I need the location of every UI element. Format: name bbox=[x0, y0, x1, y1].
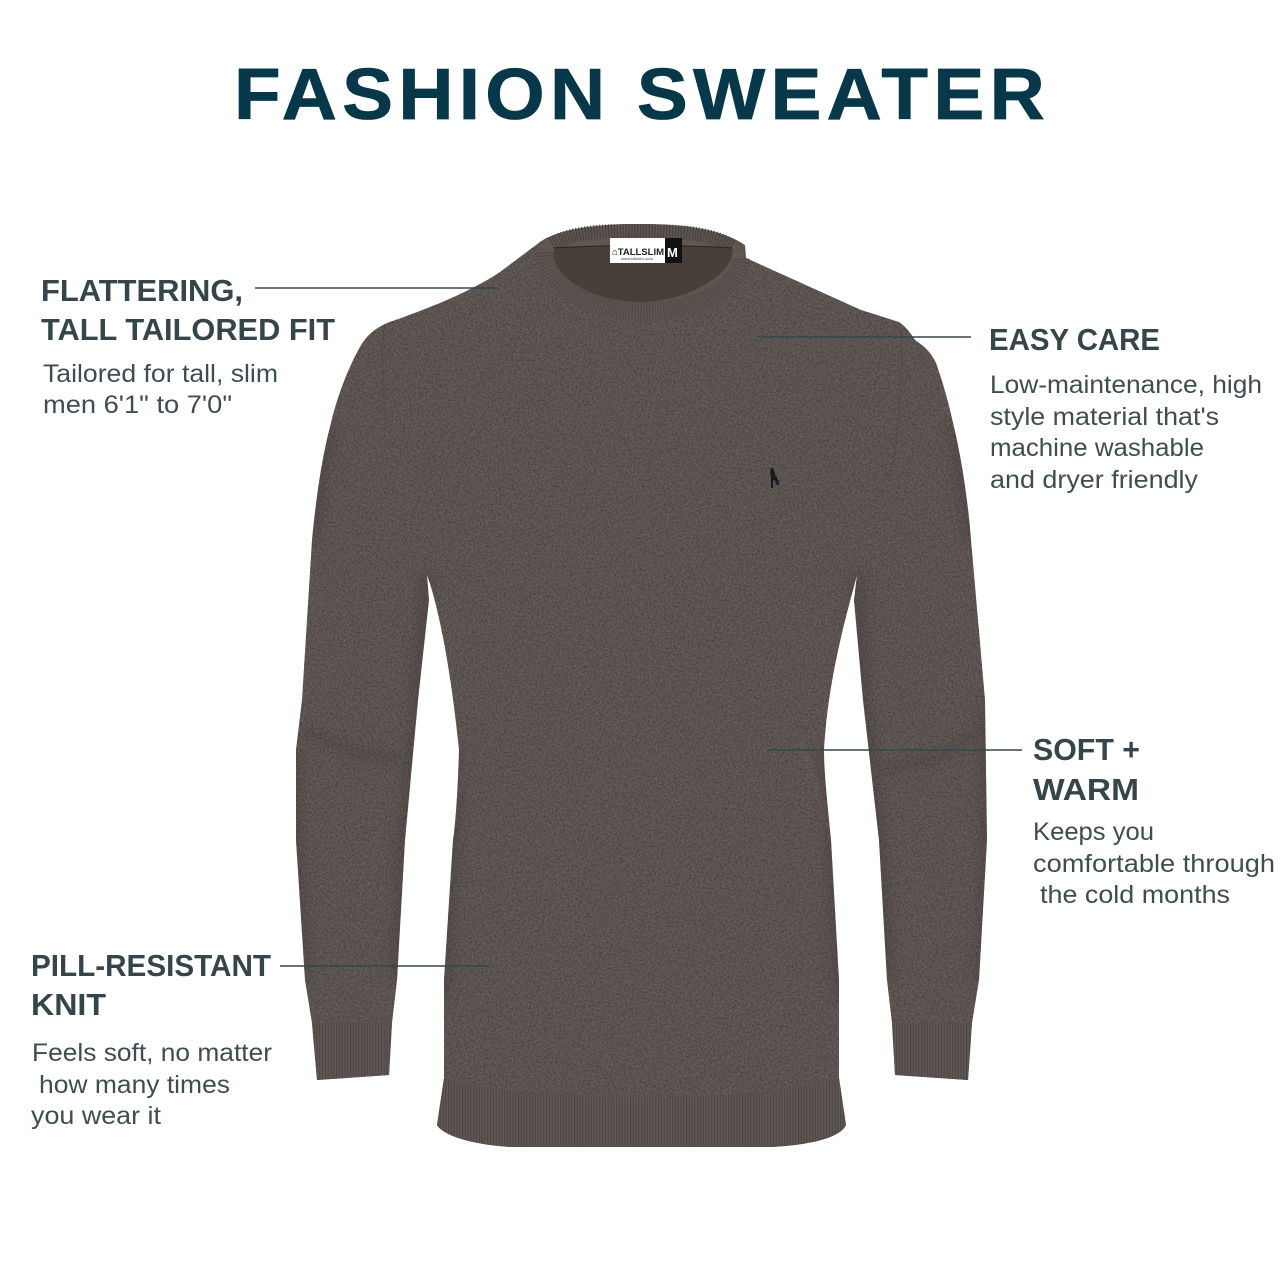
callout: soft and warm: SOFT + bbox=[1033, 732, 1140, 767]
neck label: TALLSLIM size M: ⌂TALLSLIM bbox=[612, 247, 664, 258]
icon: embroidered logo bbox=[770, 468, 779, 488]
neck label: TALLSLIM size M bbox=[610, 238, 682, 263]
callout: easy care: and dryer friendly bbox=[990, 466, 1199, 494]
callout: soft and warm: the cold months bbox=[1040, 881, 1230, 909]
sweater product photo bbox=[280, 210, 1000, 1160]
callout: flattering fit bbox=[41, 273, 497, 419]
sweater fabric bbox=[280, 210, 1000, 1160]
crew neck collar bbox=[538, 224, 748, 322]
callout: flattering fit: FLATTERING, bbox=[41, 273, 243, 308]
callout: pill-resistant knit: how many times bbox=[39, 1071, 230, 1099]
title: FASHION SWEATER bbox=[234, 55, 1050, 135]
left cuff ribbing bbox=[312, 1023, 392, 1080]
callout: easy care: machine washable bbox=[990, 434, 1204, 462]
bottom hem ribbing bbox=[437, 1078, 846, 1147]
callout: soft and warm: Keeps you bbox=[1033, 818, 1154, 846]
callout: pill-resistant knit bbox=[31, 948, 490, 1130]
callout: flattering fit: men 6'1" to 7'0" bbox=[43, 391, 232, 419]
callout: easy care bbox=[757, 322, 1262, 494]
callout: soft and warm: comfortable through bbox=[1033, 850, 1275, 878]
callout: soft and warm bbox=[768, 732, 1275, 909]
callout: pill-resistant knit: PILL-RESISTANT bbox=[31, 948, 271, 983]
callout: flattering fit: TALL TAILORED FIT bbox=[41, 312, 335, 347]
callout: easy care: Low-maintenance, high bbox=[990, 371, 1262, 399]
callout: easy care: EASY CARE bbox=[989, 322, 1160, 357]
right cuff ribbing bbox=[892, 1023, 972, 1080]
callout: easy care: style material that's bbox=[990, 403, 1219, 431]
callout: flattering fit: Tailored for tall, slim bbox=[43, 360, 278, 388]
neck label: TALLSLIM size M: M bbox=[667, 245, 678, 260]
armhole seams bbox=[382, 322, 902, 480]
callout: pill-resistant knit: you wear it bbox=[31, 1102, 161, 1130]
neck label: TALLSLIM size M: www.tallslim.com bbox=[621, 257, 653, 261]
callout: pill-resistant knit: KNIT bbox=[31, 987, 106, 1022]
callout: pill-resistant knit: Feels soft, no matter bbox=[32, 1039, 272, 1067]
callout: soft and warm: WARM bbox=[1033, 772, 1139, 807]
